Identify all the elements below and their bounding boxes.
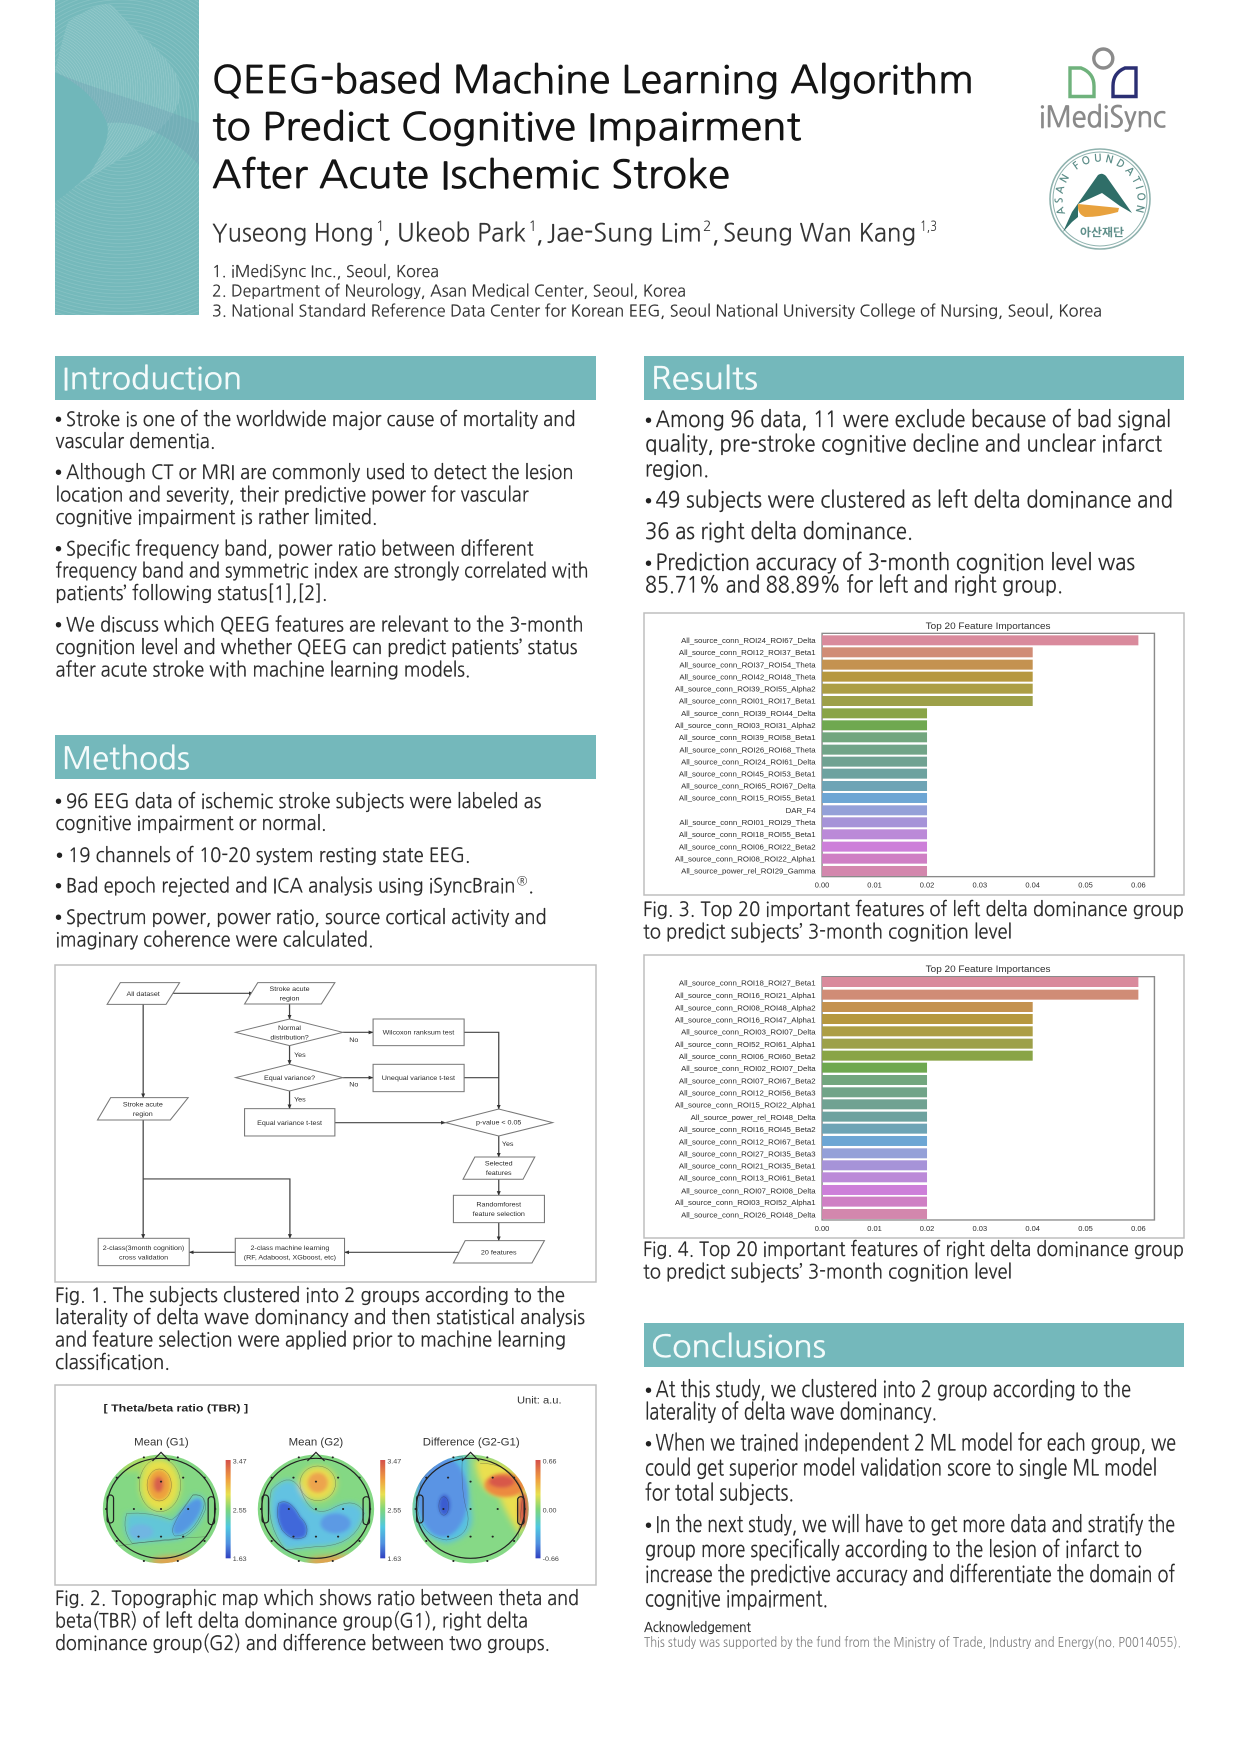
- text block: conclusions bullets: for total subjects.: [645, 1482, 794, 1506]
- text block: methods bullets: imaginary coherence were calculated.: [56, 930, 374, 950]
- flowchart panel: No: [349, 1082, 359, 1089]
- bar chart: figure 3: All_source_conn_ROI01_ROI17_Beta1: [679, 697, 816, 706]
- text block: introduction bullets: patients’ following status[1],[2].: [56, 583, 328, 603]
- caption: figure 2: dominance group(G2) and difference between two groups.: [55, 1633, 550, 1653]
- text block: methods bullets: [55, 791, 546, 950]
- flowchart panel: 2-class(3month cognition): [103, 1245, 184, 1252]
- topographic map panel: Unit: a.u.: [517, 1396, 562, 1406]
- acknowledgement: This study was supported by the fund from the Ministry of Trade, Industry and Energy(no. P0014055).: [644, 1636, 1181, 1649]
- bar chart: figure 4: All_source_conn_ROI02_ROI07_Delta: [681, 1064, 816, 1073]
- text block: results bullets: •: [645, 490, 652, 512]
- flowchart panel: Stroke acute: [270, 986, 310, 993]
- authors: Yuseong Hong: [212, 220, 374, 246]
- text block: results bullets: •: [645, 553, 652, 575]
- bar chart: figure 3: All_source_conn_ROI01_ROI29_Theta: [679, 818, 816, 827]
- bar chart: figure 3: All_source_conn_ROI06_ROI22_Beta2: [679, 843, 816, 851]
- topographic map panel: [55, 1385, 596, 1585]
- flowchart panel: region: [133, 1111, 153, 1118]
- bar chart: figure 4: All_source_conn_ROI15_ROI22_Alpha1: [675, 1101, 816, 1110]
- bar chart: figure 3: All_source_conn_ROI18_ROI55_Beta1: [679, 830, 816, 839]
- text block: results bullets: 85.71% and 88.89% for left and right group.: [645, 574, 1063, 596]
- bar chart: figure 3: 0.06: [1131, 881, 1146, 889]
- text block: methods bullets: 96 EEG data of ischemic stroke subjects were labeled as: [66, 791, 542, 812]
- heading: conclusions: Conclusions: [651, 1331, 826, 1362]
- title: [212, 61, 974, 194]
- text block: methods bullets: Spectrum power, power ratio, source cortical activity and: [66, 907, 546, 927]
- bar chart: figure 3: All_source_conn_ROI03_ROI31_Alpha2: [675, 721, 816, 730]
- caption: figure 1: laterality of delta wave dominancy and then statistical analysis: [55, 1307, 585, 1327]
- caption: figure 1: and feature selection were applied prior to machine learning: [55, 1330, 566, 1350]
- topomap: difference: [411, 1437, 559, 1567]
- bar chart: figure 4: All_source_power_rel_ROI48_Delta: [691, 1113, 816, 1122]
- text block: results bullets: 49 subjects were clustered as left delta dominance and: [656, 490, 1173, 512]
- logo: Asan Foundation: [1049, 148, 1151, 250]
- acknowledgement: Acknowledgement: [644, 1621, 751, 1634]
- authors: ,: [712, 220, 720, 246]
- bar chart: figure 4: 0.04: [1025, 1224, 1040, 1233]
- bar chart: figure 4: All_source_conn_ROI08_ROI48_Alpha2: [675, 1004, 816, 1012]
- text block: introduction bullets: after acute stroke with machine learning models.: [56, 660, 470, 680]
- text block: methods bullets: 19 channels of 10-20 system resting state EEG.: [68, 845, 470, 865]
- bar chart: figure 4: All_source_conn_ROI21_ROI35_Beta1: [679, 1162, 816, 1171]
- text block: conclusions bullets: •: [645, 1380, 652, 1402]
- bar chart: figure 3: 0.03: [973, 881, 987, 889]
- flowchart panel: Yes: [294, 1096, 306, 1103]
- text block: conclusions bullets: laterality of delta wave dominancy.: [645, 1402, 937, 1424]
- panel: results: [643, 356, 1184, 1282]
- topomap: mean G1: 3.47: [233, 1458, 247, 1465]
- caption: figure 3: Fig. 3. Top 20 important features of left delta dominance group: [643, 899, 1184, 919]
- text block: methods bullets: •: [55, 791, 62, 813]
- bar chart: figure 4: All_source_conn_ROI07_ROI08_Delta: [681, 1187, 816, 1195]
- title: to Predict Cognitive Impairment: [212, 108, 801, 146]
- topomap: difference: Difference (G2-G1): [423, 1437, 520, 1449]
- panel: introduction: [55, 356, 596, 680]
- caption: figure 2: Fig. 2. Topographic map which shows ratio between theta and: [55, 1588, 579, 1608]
- logo: iMediSync: iMediSync: [1039, 103, 1166, 132]
- bar chart: figure 4: All_source_conn_ROI12_ROI56_Beta3: [679, 1089, 816, 1098]
- authors: 2: [703, 220, 711, 234]
- authors: [212, 220, 937, 246]
- topomap: mean G1: 1.63: [233, 1556, 247, 1563]
- logo: iMediSync: [1039, 49, 1166, 132]
- bar chart: figure 3: 0.00: [815, 881, 829, 889]
- flowchart panel: (RF, Adaboost, XGboost, etc): [244, 1254, 336, 1261]
- title: After Acute Ischemic Stroke: [212, 156, 730, 194]
- topomap: mean G1: Mean (G1): [134, 1437, 189, 1449]
- authors: Jae-Sung Lim: [547, 220, 702, 246]
- topomap: difference: 0.66: [543, 1458, 557, 1465]
- text block: results bullets: quality, pre-stroke cognitive decline and unclear infarct: [645, 434, 1162, 456]
- affiliations: 3. National Standard Reference Data Center for Korean EEG, Seoul National University College of Nursing, Seoul, Korea: [212, 304, 1102, 320]
- text block: conclusions bullets: cognitive impairment.: [645, 1588, 828, 1610]
- topomap: mean G1: 2.55: [233, 1507, 247, 1514]
- flowchart panel: Yes: [294, 1052, 306, 1059]
- text block: results bullets: [645, 409, 1173, 596]
- flowchart panel: region: [280, 996, 300, 1002]
- bar chart: figure 3: All_source_conn_ROI42_ROI48_Theta: [679, 673, 816, 681]
- flowchart panel: Wilcoxon ranksum test: [383, 1030, 454, 1037]
- bar chart: figure 3: All_source_power_rel_ROI29_Gamma: [681, 867, 816, 876]
- text block: methods bullets: .: [528, 876, 534, 896]
- bar chart: figure 4: All_source_conn_ROI13_ROI61_Beta1: [679, 1174, 816, 1183]
- heading: results: Results: [651, 363, 758, 394]
- caption: figure 3: to predict subjects’ 3-month cognition level: [643, 922, 1012, 942]
- text block: results bullets: 36 as right delta dominance.: [645, 521, 913, 543]
- text block: conclusions bullets: At this study, we clustered into 2 group according to the: [656, 1379, 1131, 1401]
- bar chart: figure 4: All_source_conn_ROI26_ROI48_Delta: [681, 1211, 816, 1219]
- text block: results bullets: region.: [645, 458, 709, 480]
- flowchart panel: 20 features: [481, 1250, 517, 1257]
- flowchart panel: Stroke acute: [123, 1102, 163, 1109]
- topomap: difference: -0.66: [543, 1556, 559, 1563]
- caption: figure 1: [55, 1285, 585, 1372]
- caption: figure 2: beta(TBR) of left delta dominance group(G1), right delta: [55, 1610, 528, 1630]
- affiliations: 2. Department of Neurology, Asan Medical Center, Seoul, Korea: [212, 284, 686, 300]
- text block: introduction bullets: frequency band and symmetric index are strongly correlated with: [56, 560, 588, 580]
- bar chart: figure 4: All_source_conn_ROI06_ROI60_Beta2: [679, 1052, 816, 1061]
- authors: ,: [383, 220, 391, 246]
- heading: methods: [55, 735, 596, 779]
- bar chart: figure 3: All_source_conn_ROI08_ROI22_Alpha1: [675, 855, 816, 863]
- bar chart: figure 4: 0.00: [815, 1224, 829, 1233]
- bar chart: figure 3: All_source_conn_ROI24_ROI61_Delta: [681, 758, 816, 766]
- text block: introduction bullets: •: [55, 614, 62, 636]
- bar chart: figure 3: 0.02: [920, 881, 934, 889]
- caption: figure 1: Fig. 1. The subjects clustered into 2 groups according to the: [55, 1285, 565, 1306]
- flowchart panel: cross validation: [119, 1254, 168, 1261]
- caption: figure 2: [55, 1588, 579, 1653]
- caption: figure 3: [643, 899, 1184, 942]
- bar chart: figure 3: 0.05: [1078, 881, 1093, 889]
- flowchart panel: [55, 965, 596, 1282]
- caption: figure 1: classification.: [55, 1352, 170, 1372]
- text block: introduction bullets: We discuss which QEEG features are relevant to the 3-month: [66, 614, 584, 634]
- authors: Seung Wan Kang: [723, 220, 916, 246]
- text block: results bullets: •: [645, 410, 652, 432]
- bar chart: figure 3: 0.01: [867, 881, 882, 889]
- bar chart: figure 3: All_source_conn_ROI15_ROI55_Beta1: [679, 794, 816, 803]
- flowchart panel: distribution?: [270, 1034, 309, 1041]
- bar chart: figure 4: All_source_conn_ROI12_ROI67_Beta1: [679, 1138, 816, 1146]
- bar chart: figure 3: All_source_conn_ROI39_ROI58_Beta1: [679, 733, 816, 742]
- text block: introduction bullets: Although CT or MRI are commonly used to detect the lesion: [66, 462, 574, 482]
- bar chart: figure 4: All_source_conn_ROI03_ROI52_Alpha1: [675, 1198, 816, 1207]
- text block: conclusions bullets: •: [645, 1434, 652, 1456]
- flowchart panel: Equal variance?: [264, 1075, 315, 1082]
- text block: introduction bullets: vascular dementia.: [56, 431, 216, 451]
- logo: Asan Foundation: 아산재단: [1080, 224, 1124, 240]
- flowchart panel: Randomforest: [476, 1202, 521, 1209]
- decorative wave band: [55, 0, 199, 315]
- caption: figure 4: [643, 1239, 1184, 1282]
- flowchart panel: All dataset: [127, 991, 160, 998]
- authors: Ukeob Park: [397, 220, 526, 246]
- text block: methods bullets: •: [56, 845, 63, 867]
- flowchart panel: Equal variance t-test: [257, 1120, 322, 1127]
- bar chart: figure 4: 0.03: [973, 1224, 987, 1233]
- authors: 1,3: [920, 220, 937, 234]
- bar chart: figure 4: All_source_conn_ROI18_ROI27_Beta1: [679, 979, 816, 987]
- bar chart: figure 3: 0.04: [1025, 881, 1040, 889]
- logo: Asan Foundation: ASAN FOUNDATION: [1054, 154, 1146, 214]
- text block: introduction bullets: cognition level and whether QEEG can predict patients’ status: [56, 637, 578, 657]
- heading: results: [644, 356, 1184, 400]
- topomap: mean G2: 3.47: [387, 1458, 401, 1465]
- text block: conclusions bullets: •: [645, 1515, 652, 1537]
- text block: introduction bullets: Stroke is one of the worldwide major cause of mortality and: [66, 409, 576, 430]
- heading: introduction: [55, 356, 596, 400]
- panel: conclusions: [644, 1323, 1184, 1649]
- bar chart: figure 3: All_source_conn_ROI24_ROI67_Delta: [681, 636, 816, 645]
- flowchart panel: No: [349, 1037, 359, 1044]
- text block: introduction bullets: •: [55, 409, 62, 431]
- bar chart: figure 3: All_source_conn_ROI26_ROI68_Theta: [679, 746, 816, 754]
- text block: methods bullets: •: [55, 876, 62, 898]
- bar chart: figure 4: All_source_conn_ROI03_ROI07_Delta: [681, 1028, 816, 1037]
- text block: methods bullets: cognitive impairment or normal.: [56, 813, 326, 833]
- text block: conclusions bullets: [645, 1379, 1176, 1610]
- affiliations: 1. iMediSync Inc., Seoul, Korea: [212, 264, 439, 280]
- heading: methods: Methods: [62, 743, 190, 774]
- topomap: mean G2: 2.55: [387, 1507, 401, 1514]
- affiliations: [212, 264, 1102, 320]
- text block: introduction bullets: cognitive impairment is rather limited.: [56, 507, 378, 527]
- bar chart: figure 4: All_source_conn_ROI07_ROI67_Beta2: [679, 1077, 816, 1085]
- authors: ,: [536, 220, 544, 246]
- flowchart panel: Unequal variance t-test: [382, 1075, 455, 1082]
- bar chart: figure 4: All_source_conn_ROI16_ROI21_Alpha1: [675, 991, 816, 1000]
- flowchart panel: 2-class machine learning: [251, 1245, 329, 1252]
- panel: methods: [55, 735, 596, 1653]
- flowchart panel: features: [486, 1170, 512, 1177]
- bar chart: figure 3: All_source_conn_ROI39_ROI55_Alpha2: [675, 685, 816, 693]
- bar chart: figure 4: Top 20 Feature Importances: [926, 964, 1051, 975]
- flowchart panel: feature selection: [473, 1211, 525, 1218]
- bar chart: figure 3: [644, 613, 1184, 895]
- bar chart: figure 3: All_source_conn_ROI39_ROI44_Delta: [681, 709, 816, 718]
- bar chart: figure 4: All_source_conn_ROI16_ROI45_Beta2: [679, 1125, 816, 1134]
- text block: results bullets: Prediction accuracy of 3-month cognition level was: [656, 552, 1135, 574]
- text block: methods bullets: ®: [517, 875, 527, 887]
- authors: 1: [528, 220, 537, 234]
- bar chart: figure 4: [644, 955, 1184, 1238]
- text block: methods bullets: Bad epoch rejected and ICA analysis using iSyncBrain: [66, 876, 516, 896]
- bar chart: figure 4: 0.05: [1078, 1224, 1093, 1233]
- bar chart: figure 4: 0.06: [1131, 1224, 1146, 1233]
- text block: introduction bullets: [55, 409, 588, 680]
- bar chart: figure 3: Top 20 Feature Importances: [926, 621, 1051, 632]
- bar chart: figure 3: All_source_conn_ROI37_ROI54_Theta: [679, 661, 816, 669]
- flowchart panel: Normal: [278, 1025, 302, 1032]
- text block: introduction bullets: •: [55, 538, 62, 560]
- text block: introduction bullets: location and severity, their predictive power for vascular: [56, 484, 529, 504]
- text block: methods bullets: •: [55, 907, 62, 929]
- topomap: mean G2: [255, 1437, 401, 1568]
- caption: figure 4: to predict subjects’ 3-month cognition level: [643, 1262, 1012, 1282]
- authors: 1: [376, 220, 384, 234]
- topomap: mean G2: Mean (G2): [289, 1437, 343, 1449]
- bar chart: figure 4: 0.02: [920, 1224, 934, 1233]
- flowchart panel: Yes: [502, 1141, 514, 1148]
- text block: introduction bullets: •: [55, 462, 62, 484]
- caption: figure 4: Fig. 4. Top 20 important features of right delta dominance group: [643, 1239, 1184, 1259]
- text block: conclusions bullets: group more specifically according to the lesion of infarct to: [645, 1539, 1142, 1561]
- bar chart: figure 4: All_source_conn_ROI52_ROI61_Alpha1: [675, 1040, 816, 1049]
- topographic map panel: [ Theta/beta ratio (TBR) ]: [104, 1403, 248, 1414]
- bar chart: figure 4: All_source_conn_ROI16_ROI47_Alpha1: [675, 1016, 816, 1024]
- bar chart: figure 3: All_source_conn_ROI45_ROI53_Beta1: [679, 770, 816, 778]
- bar chart: figure 4: All_source_conn_ROI27_ROI35_Beta3: [679, 1150, 816, 1159]
- text block: introduction bullets: Specific frequency band, power ratio between different: [66, 538, 534, 558]
- heading: conclusions: [644, 1323, 1184, 1367]
- bar chart: figure 4: 0.01: [867, 1224, 882, 1233]
- topomap: mean G1: [100, 1437, 247, 1568]
- flowchart panel: p-value < 0.05: [476, 1120, 522, 1127]
- title: QEEG-based Machine Learning Algorithm: [212, 61, 974, 99]
- bar chart: figure 3: All_source_conn_ROI12_ROI37_Beta1: [679, 648, 816, 657]
- bar chart: figure 3: DAR_F4: [786, 806, 816, 815]
- topomap: mean G2: 1.63: [387, 1556, 401, 1563]
- acknowledgement: [644, 1621, 1181, 1649]
- text block: results bullets: Among 96 data, 11 were exclude because of bad signal: [656, 409, 1171, 431]
- flowchart panel: Selected: [485, 1161, 513, 1168]
- bar chart: figure 3: All_source_conn_ROI65_ROI67_Delta: [681, 782, 816, 791]
- heading: introduction: Introduction: [62, 363, 242, 394]
- topomap: difference: 0.00: [543, 1507, 557, 1514]
